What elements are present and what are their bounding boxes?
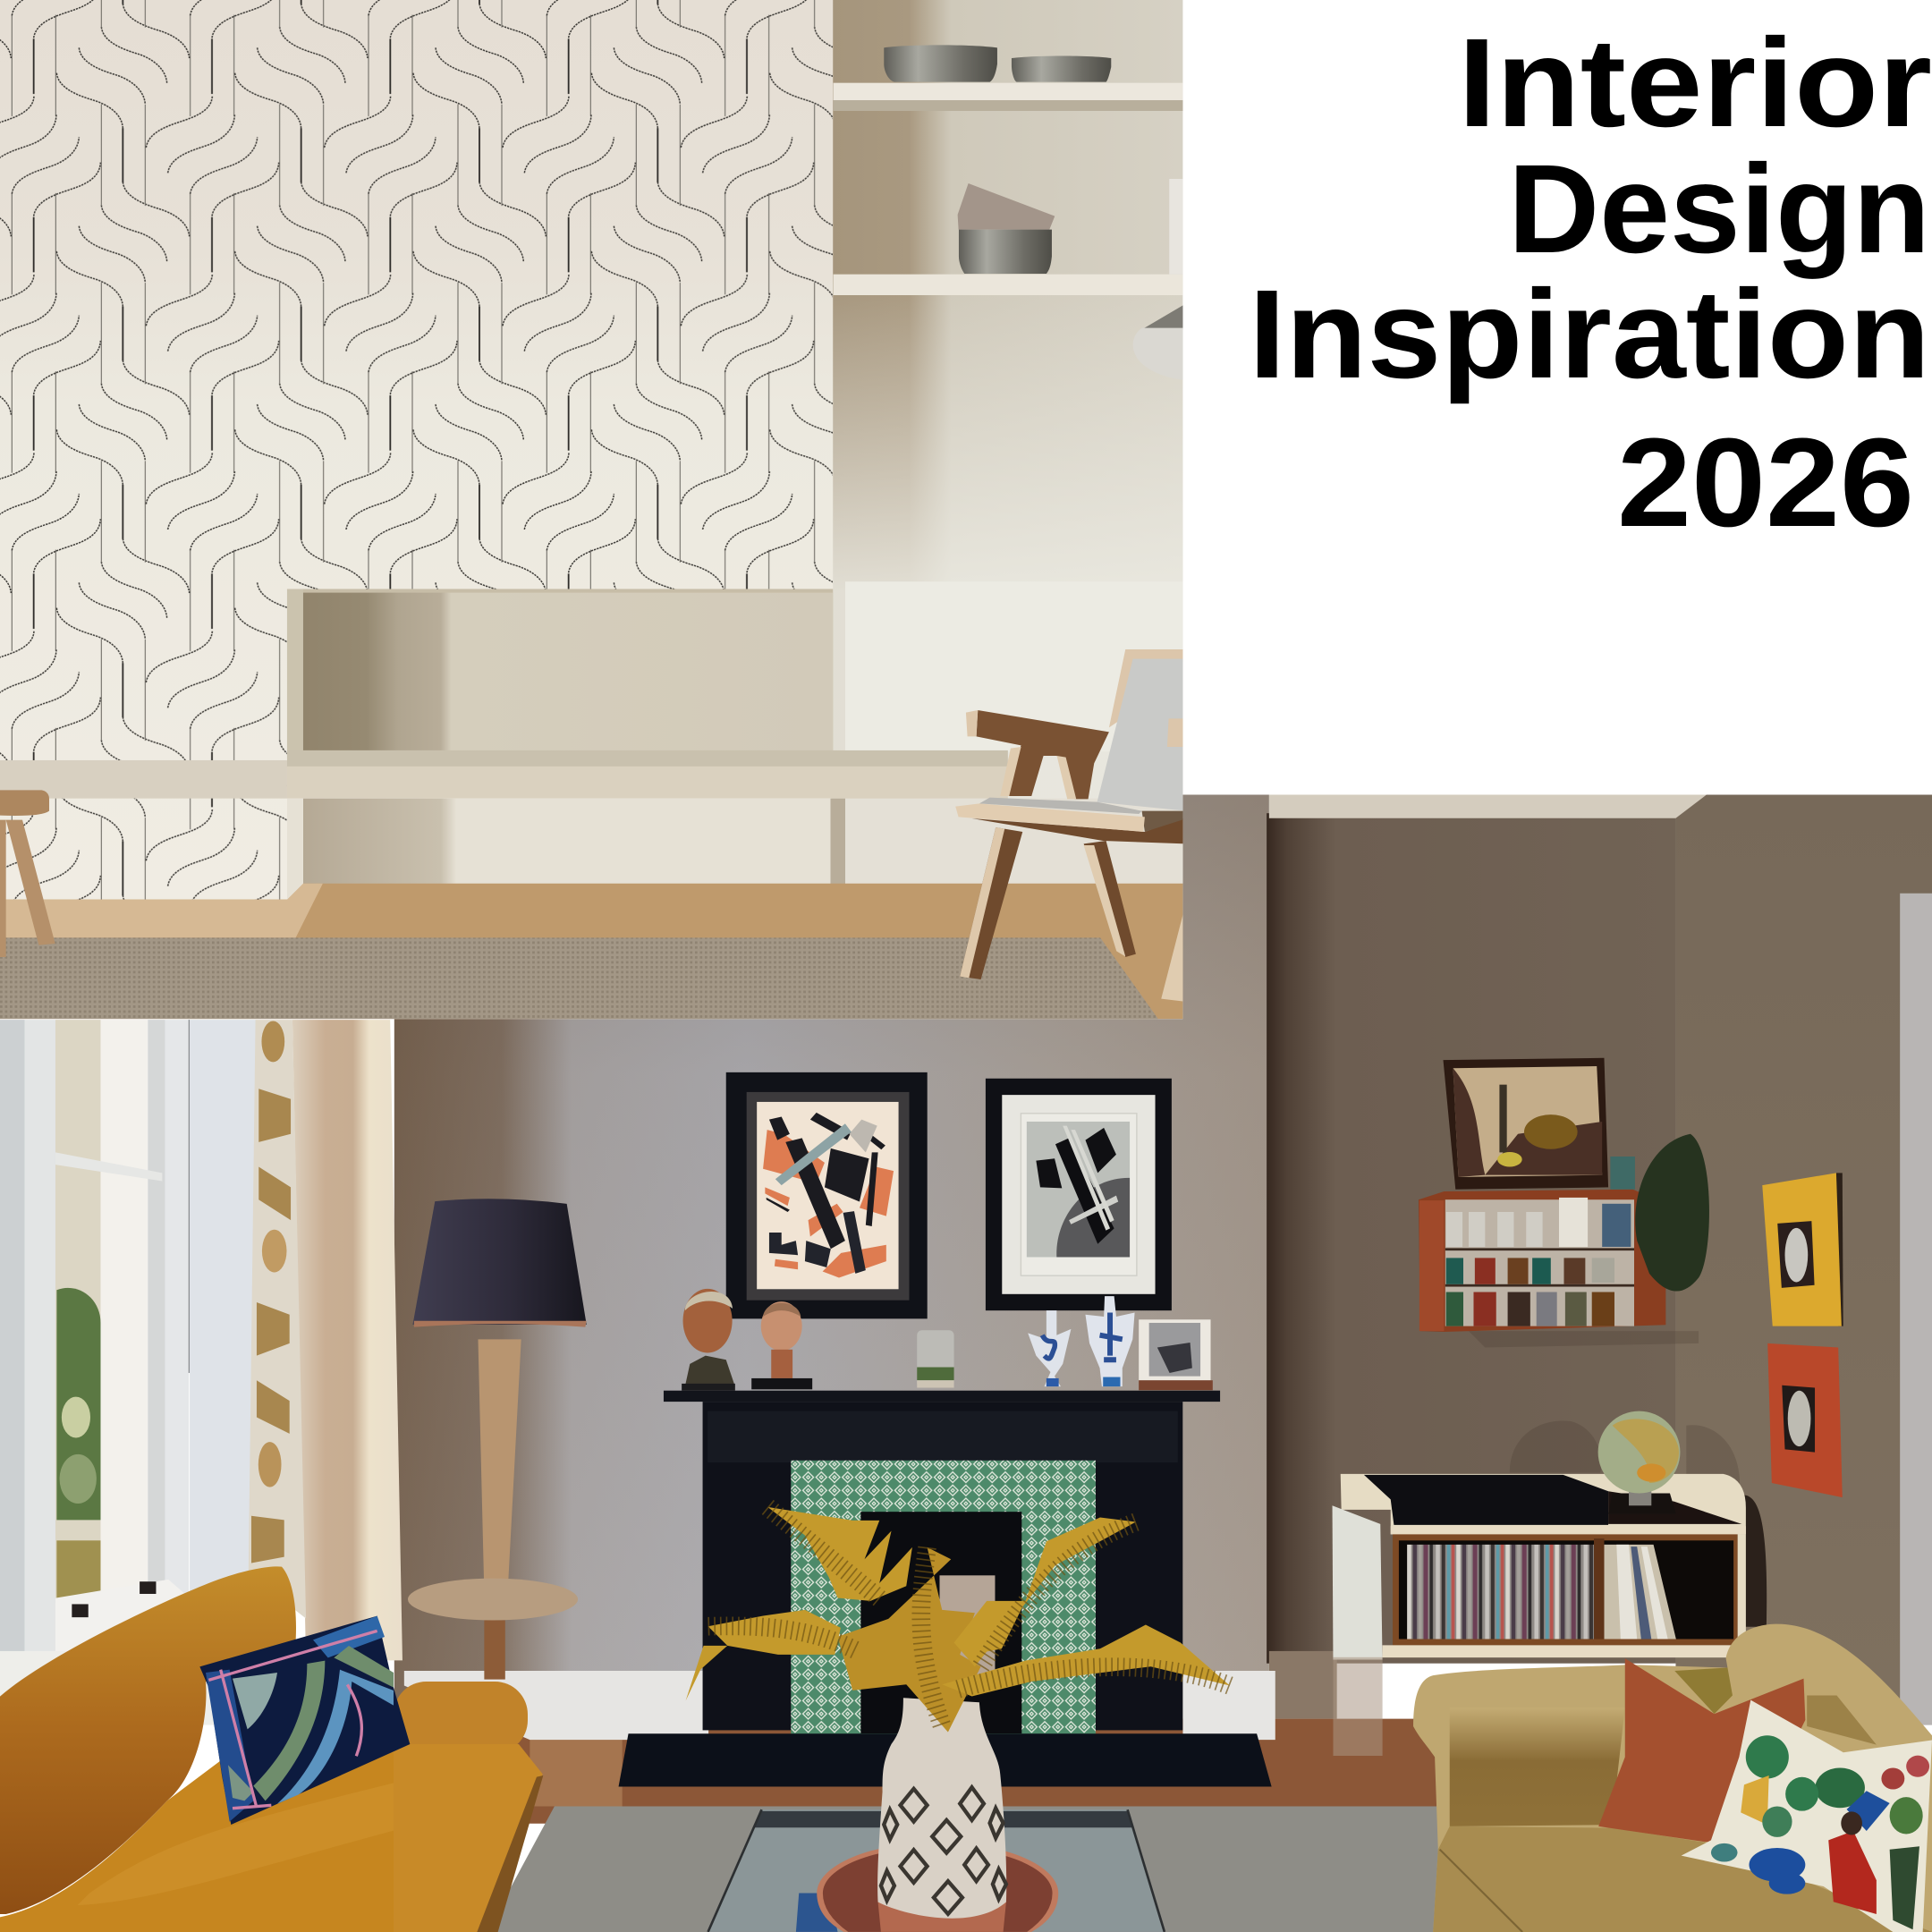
pattern wall (0, 0, 833, 900)
bowl small (1012, 55, 1111, 82)
red frame (1767, 1343, 1843, 1497)
bolster and seat (0, 1747, 394, 1932)
window (0, 1020, 257, 1660)
navy cushion (199, 1616, 410, 1825)
hearth (619, 1733, 1272, 1786)
fireplace (664, 1391, 1220, 1740)
title line: Design: Design (1508, 138, 1930, 279)
olive sofa (1413, 1624, 1932, 1932)
bright wall patch (845, 581, 1182, 751)
alcove skirting (1269, 1651, 1337, 1719)
wall shelf (1419, 1157, 1699, 1347)
side door (1900, 894, 1932, 1725)
alcove wall (832, 0, 1182, 887)
side wall (1675, 795, 1932, 1713)
glass jar (917, 1330, 954, 1387)
armchair (955, 649, 1187, 1002)
photo: eclectic living room (0, 795, 1932, 1932)
rust cushion (1598, 1658, 1805, 1843)
title line: 2026: 2026 (1617, 411, 1914, 553)
framed art left (726, 1072, 928, 1318)
framed cube (1139, 1319, 1213, 1390)
title line: Interior: Interior (1458, 12, 1932, 153)
wall painting (1444, 1058, 1608, 1190)
alcove shelves and objects (834, 45, 1185, 380)
title (1249, 12, 1932, 553)
niche (287, 589, 833, 760)
stool (0, 790, 55, 957)
sofa arm roll (295, 1646, 543, 1932)
window sill under sofa (0, 1651, 215, 1724)
floor (517, 1719, 1436, 1824)
alcove wall (1267, 813, 1675, 1664)
skirting boards (404, 1671, 1275, 1740)
bench (0, 750, 1008, 799)
stacked bowls (958, 183, 1055, 274)
bust small (751, 1301, 812, 1389)
fern (686, 1507, 1230, 1733)
back wall (394, 795, 1269, 1725)
pendant lamp (1133, 304, 1185, 380)
bowl large (884, 45, 997, 82)
niche return wall (287, 799, 303, 900)
globe (1598, 1411, 1680, 1513)
floor lamp (408, 1199, 587, 1680)
lower shelf (834, 275, 1185, 295)
woven vase (877, 1698, 1006, 1932)
curtain (249, 1020, 402, 1660)
book (1169, 179, 1184, 275)
photo: minimalist cream room (0, 0, 1187, 1019)
rug (487, 1806, 1454, 1932)
bust large (682, 1289, 735, 1391)
crown moulding (1269, 795, 1707, 818)
title line: Inspiration: Inspiration (1249, 263, 1930, 404)
glass coffee table (708, 1809, 1165, 1932)
yellow frame (1762, 1173, 1843, 1326)
framed art right (986, 1079, 1172, 1310)
vase large (1085, 1296, 1135, 1386)
rug (0, 937, 1158, 1019)
copper tray (817, 1843, 1058, 1932)
acrylic cabinet foot (1334, 1657, 1383, 1756)
mustard sofa (0, 1566, 543, 1932)
floral cushion (1682, 1700, 1932, 1932)
wood floor (0, 884, 1182, 1019)
lower wall (303, 799, 1182, 885)
record cabinet (1333, 1420, 1767, 1659)
upper shelf (834, 83, 1185, 111)
vase small (1028, 1310, 1071, 1386)
plant (1635, 1134, 1709, 1292)
mantel objects (682, 1289, 1213, 1391)
